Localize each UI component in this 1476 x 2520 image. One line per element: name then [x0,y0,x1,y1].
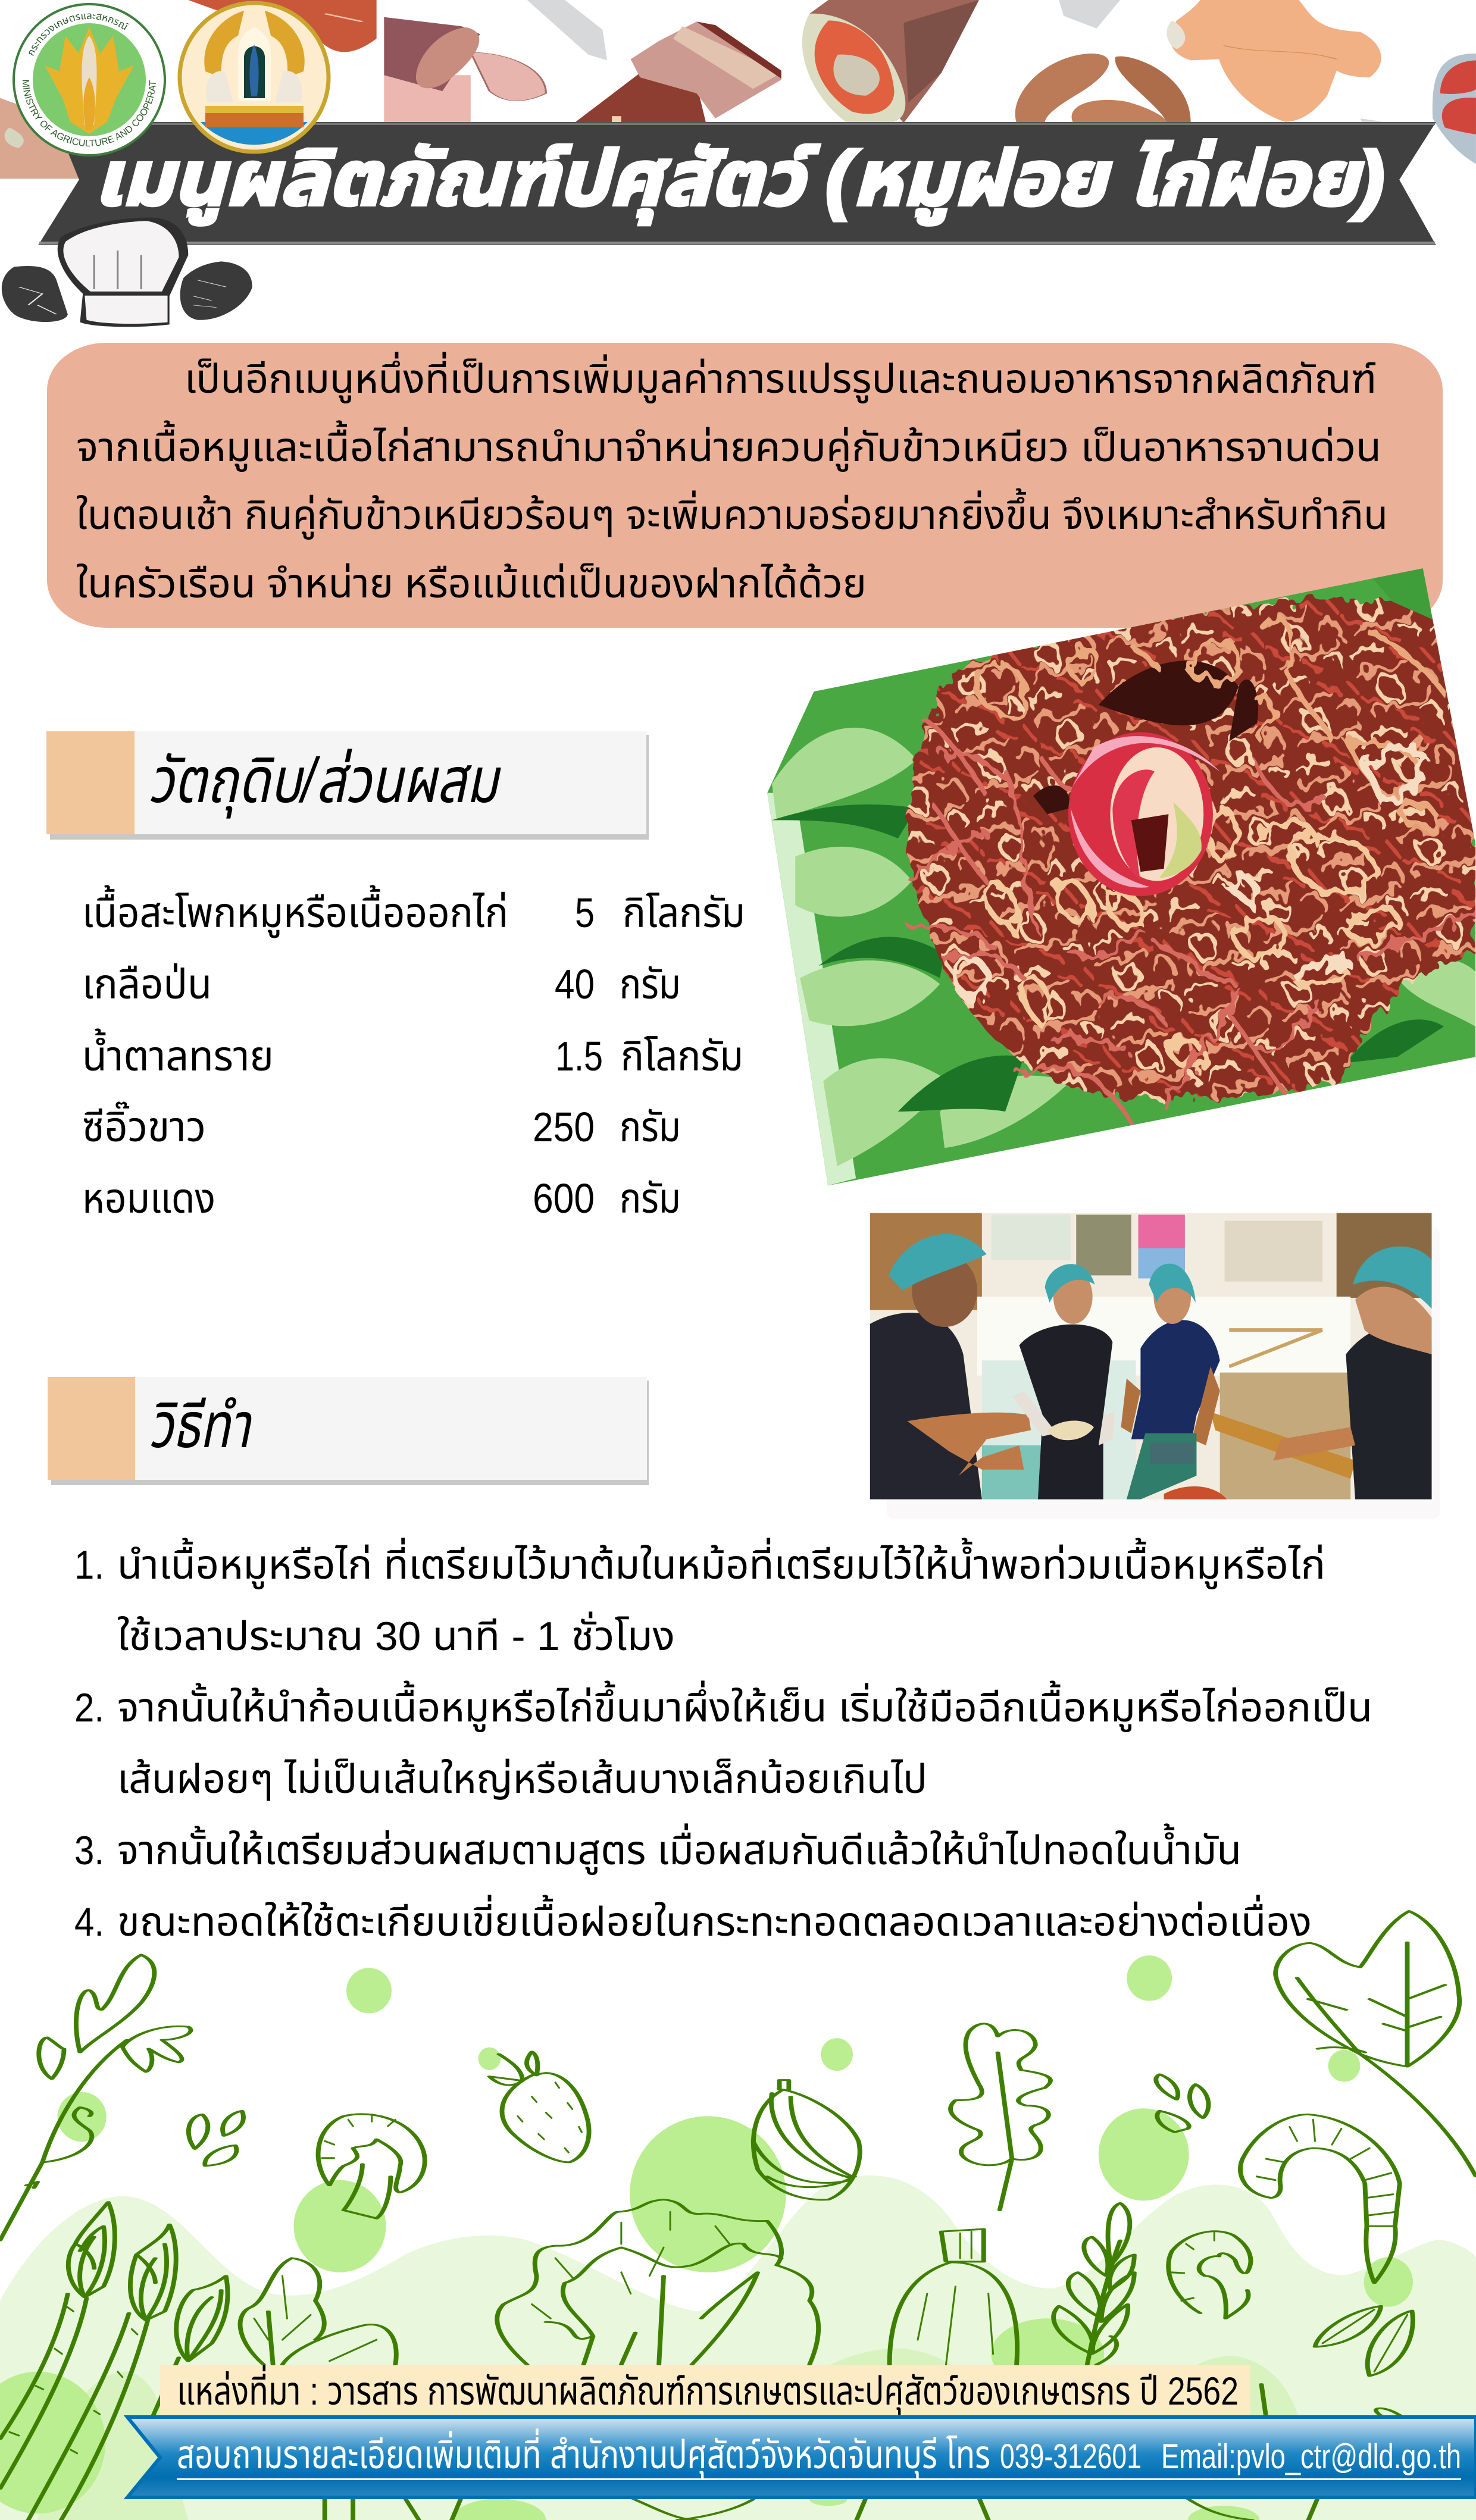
title ribbon [39,123,1435,245]
logo: ministry of agriculture and cooperatives: กระทรวงเกษตรและสหกรณ์ [29,13,129,56]
ingredient list: เนื้อสะโพกหมูหรือเนื้อออกไก่ [82,885,508,938]
ingredient list: กิโลกรัม [623,890,745,936]
method steps: จากนั้นให้เตรียมส่วนผสมตามสูตร เมื่อผสมกันดีแล้วให้นำไปทอดในน้ำมัน [117,1823,1242,1875]
contact text: 039-312601 [1000,2437,1142,2476]
method steps: 3. [74,1828,104,1873]
source text: แหล่งที่มา : วารสาร การพัฒนาผลิตภัณฑ์การเกษตรและปศุสัตว์ของเกษตรกร ปี 2562 [177,2365,1239,2415]
method steps: 2. [74,1685,104,1730]
heading text: วัตถุดิบ/ส่วนผสม [148,746,502,819]
lettuce [497,2200,818,2365]
ingredient list: 1.5 [555,1033,603,1079]
title text: เมนูผลิตภัณฑ์ปศุสัตว์ (หมูฝอย ไก่ฝอย) [94,136,1384,225]
shrimp [1240,2114,1400,2283]
method steps: 1. [74,1542,104,1588]
ingredient list: เกลือป่น [82,961,212,1007]
mushroom [318,2114,425,2218]
mushroom 2 [1168,2231,1250,2318]
source bar [160,2365,1250,2419]
ingredient list: 5 [575,890,595,936]
description text [76,352,1388,606]
description text: ในครัวเรือน จำหน่าย หรือแม้แต่เป็นของฝากได้ด้วย [76,561,867,606]
header meat illustrations [0,0,1476,179]
method steps: จากนั้นให้นำก้อนเนื้อหมูหรือไก่ขึ้นมาผึ่งให้เย็น เริ่มใช้มือฉีกเนื้อหมูหรือไก่ออกเป็น [117,1680,1372,1732]
spinach [240,2258,396,2365]
two leaves [1315,2306,1413,2376]
darker hills [37,2349,1299,2520]
method steps: ขณะทอดให้ใช้ตะเกียบเขี่ยเนื้อฝอยในกระทะทอดตลอดเวลาและอย่างต่อเนื่อง [117,1895,1312,1945]
small leaves right [1156,2074,1209,2132]
oak leaf [950,2024,1050,2210]
hair nets [889,1234,1432,1309]
ingredient list: 600 [533,1175,595,1222]
contact text [177,2428,1461,2478]
ingredient list: กรัม [620,1175,681,1222]
asparagus [0,2202,228,2520]
ingredient list: น้ำตาลทราย [82,1028,274,1079]
right top leaves [1275,1911,1476,2177]
team photo shadow [887,1227,1440,1519]
contact ribbon [127,2417,1476,2497]
strawberry [489,2052,589,2162]
method steps: เส้นฝอยๆ ไม่เป็นเส้นใหญ่หรือเส้นบางเล็กน้อยเกินไป [117,1757,927,1802]
heading: ingredients [46,731,649,840]
method steps: 4. [74,1899,104,1945]
vine with leaves [0,1955,191,2240]
ingredient list: ซีอิ๊วขาว [82,1101,206,1150]
vegetable line-art background [0,1911,1476,2520]
method steps [74,1538,1372,1945]
ingredient list: 250 [533,1104,595,1150]
ingredient list: หอมแดง [82,1175,215,1222]
squash [890,2229,1017,2365]
description panel [47,343,1443,628]
small leaves [189,2111,243,2166]
onion [753,2080,860,2200]
team photo: people preparing food [870,1213,1432,1500]
heading: method [48,1377,649,1485]
food photo: fried shredded pork nest on lettuce [767,568,1476,1185]
method steps: นำเนื้อหมูหรือไก่ ที่เตรียมไว้มาต้มในหม้อที่เตรียมไว้ให้น้ำพอท่วมเนื้อหมูหรือไก่ [117,1538,1325,1589]
herb [1053,2203,1134,2365]
logo: department of livestock development [180,3,329,152]
ingredient list: กรัม [620,961,681,1007]
heading text: วิธีทำ [149,1391,252,1461]
ingredient list: กรัม [620,1104,681,1150]
description text: ในตอนเช้า กินคู่กับข้าวเหนียวร้อนๆ จะเพิ่มความอร่อยมากยิ่งขึ้น จึงเหมาะสำหรับทำกิน [76,488,1388,540]
bottom line fragments [325,2384,1403,2520]
ingredient list: กิโลกรัม [621,1033,743,1079]
description text: เป็นอีกเมนูหนึ่งที่เป็นการเพิ่มมูลค่าการแปรรูปและถนอมอาหารจากผลิตภัณฑ์ [185,352,1377,403]
background hills [0,2175,1476,2520]
circles [0,1955,1413,2520]
ingredient list: 40 [555,961,595,1007]
contact text: สอบถามรายละเอียดเพิ่มเติมที่ สำนักงานปศุสัตว์จังหวัดจันทบุรี โทร [177,2428,990,2478]
method steps: ใช้เวลาประมาณ 30 นาที - 1 ชั่วโมง [117,1611,675,1659]
ingredient list [82,885,745,1222]
description text: จากเนื้อหมูและเนื้อไก่สามารถนำมาจำหน่ายควบคู่กับข้าวเหนียว เป็นอาหารจานด่วน [76,420,1381,472]
chef hat with steaks [2,217,252,327]
